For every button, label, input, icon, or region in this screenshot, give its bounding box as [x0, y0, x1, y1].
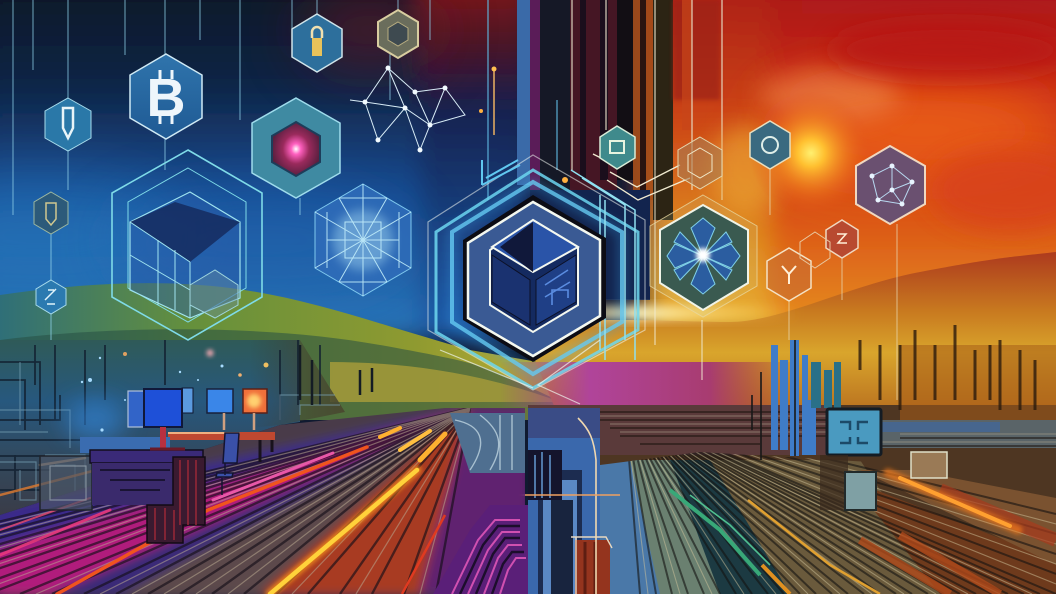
- left ground grid: [0, 340, 372, 515]
- large wireframe cube hexagon: [112, 150, 262, 340]
- right ground base: [528, 345, 1056, 594]
- outer flower hexagon outline: [650, 195, 757, 317]
- lattice hexagon: [315, 184, 411, 296]
- icon: small lock-pen hexagon: [45, 98, 91, 151]
- sun: [749, 91, 873, 215]
- icon: node network: [350, 66, 465, 152]
- right skyline towers: [752, 325, 1035, 460]
- hanging wires: [13, 0, 430, 340]
- hills: [0, 252, 1056, 420]
- monitors: [128, 388, 267, 449]
- icon: beige hexagon top: [378, 10, 418, 58]
- icon: small orange hexagons: [767, 220, 858, 301]
- icon: bitcoin hexagon: B: [146, 68, 186, 128]
- light streaks: [0, 428, 1018, 594]
- central glowing hexagon frames: [428, 154, 702, 404]
- right side wires: [770, 169, 897, 400]
- orange clouds: [710, 22, 1056, 230]
- vertical tech columns: [479, 0, 722, 300]
- icon: bitcoin hexagon: [130, 54, 202, 139]
- central cube: [463, 195, 606, 362]
- light streak floor: [0, 400, 530, 594]
- flower hexagon: [660, 205, 748, 310]
- icon: tree hexagon: [600, 126, 635, 169]
- icon: teal hexagon: [750, 121, 790, 169]
- green and olive circuit fields: [600, 452, 1056, 594]
- icon: left lower hex: [36, 280, 66, 314]
- sparkles near desks: [81, 350, 268, 432]
- purple circuit corner: [402, 413, 528, 594]
- monitor on right: [820, 409, 947, 510]
- icon: left small hex: [34, 192, 68, 234]
- icon: network hexagon: [856, 146, 925, 224]
- office chair: [216, 433, 239, 495]
- icon: lock hexagon: [292, 14, 342, 72]
- icon: glowing hexagon: [252, 98, 340, 198]
- central blue channel: [470, 408, 620, 594]
- workstation desks: [40, 388, 275, 543]
- icon: beige hex: [678, 137, 722, 189]
